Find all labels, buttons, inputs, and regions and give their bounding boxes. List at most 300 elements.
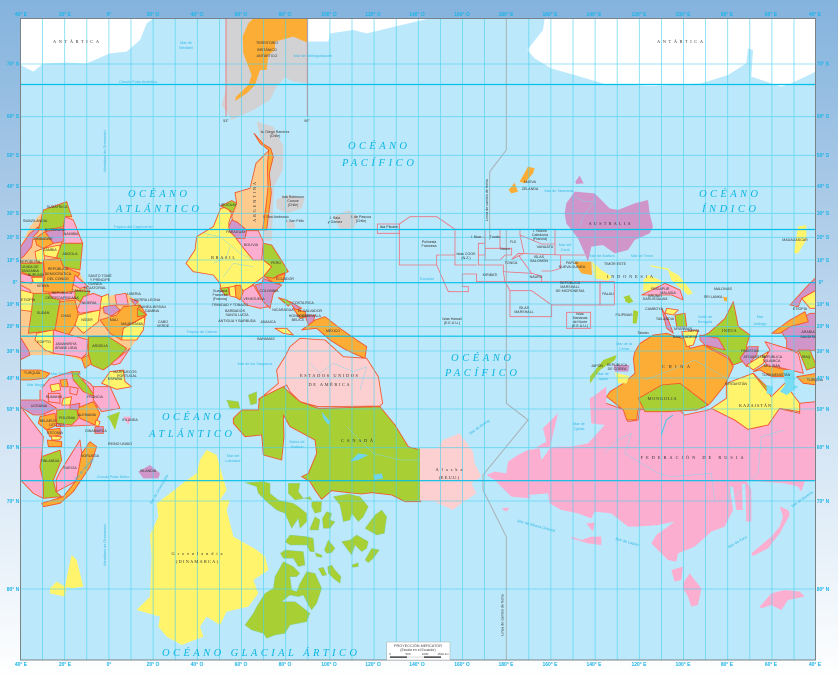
Tasmania (575, 176, 584, 184)
country and island labels: ECUADOR (276, 277, 294, 281)
graticule labels: 20° E (59, 12, 72, 18)
Zimbabwe (35, 232, 53, 248)
water feature labels: Arábigo (753, 322, 767, 326)
Antarctic claim sector (222, 18, 307, 120)
country and island labels: I. Nueva (533, 229, 547, 233)
graticule labels: 120° O (365, 662, 381, 668)
country and island labels: Islas Hawaii (442, 317, 462, 321)
graticule labels: 40° O (191, 12, 204, 18)
country and island labels: I. Sala (330, 216, 340, 220)
water feature labels: Mar de (573, 422, 585, 426)
country and island labels: MARRUECOS (113, 370, 137, 374)
country and island labels: Marianas (573, 316, 588, 320)
graticule labels: 120° O (365, 12, 381, 18)
Arabia (780, 313, 817, 352)
country and island labels: TURKMENISTÁN (762, 373, 791, 377)
water feature labels: Bahía de (289, 440, 305, 444)
Canada mainland (233, 387, 421, 502)
ocean names: ATLÁNTICO (148, 428, 232, 440)
country and island labels: Y PRÍNCIPE (90, 278, 111, 282)
country and island labels: Caledonia (532, 233, 548, 237)
country and island labels: IRLANDA (122, 418, 138, 422)
continent and large country names: ANTÁRTICA (53, 39, 100, 44)
country and island labels: Is. Diego Ramírez (261, 130, 290, 134)
Afghanistan (747, 352, 768, 370)
graticule labels: 40° E (809, 662, 822, 668)
continent and large country names: DE AMÉRICA (308, 382, 350, 387)
country and island labels: BURUNDI (28, 273, 44, 277)
date line labels (485, 179, 505, 636)
country and island labels: PAPÚA (566, 260, 579, 265)
Australia (565, 192, 653, 262)
water feature labels: Mar de Arafura (589, 254, 615, 258)
water feature labels: Mar de Groenlandia (149, 473, 170, 505)
graticule labels: 20° O (147, 12, 160, 18)
country and island labels: BRUNEI (648, 294, 662, 298)
country and island labels: NIGERIA (82, 301, 97, 305)
country and island labels: (Chile) (356, 219, 366, 223)
water feature labels: Mar de Bellingshausen (294, 54, 332, 58)
Southeast Asia islands (590, 270, 727, 383)
water feature labels: Golfo de (698, 315, 712, 319)
graticule labels: 60° N (7, 445, 20, 451)
country and island labels: MÉXICO (326, 328, 340, 333)
continent and large country names: (E.E.U.U.) (439, 475, 460, 480)
country and island labels: REINO UNIDO (108, 442, 132, 446)
Mongolia (638, 383, 708, 412)
graticule labels: 40° E (15, 12, 28, 18)
country and island labels: CAMERÚN (72, 288, 90, 293)
country and island labels: FRANCIA (87, 395, 103, 399)
Ethiopia (21, 290, 33, 312)
country and island labels: VERDE (157, 324, 170, 328)
Libya (53, 330, 88, 358)
Pakistan (740, 347, 758, 367)
country and island labels: KIRGUISTÁN (725, 382, 747, 386)
country and island labels: DEL CONGO (47, 277, 69, 281)
country and island labels: GAMBIA (145, 309, 160, 313)
country and island labels: Crusoe (287, 199, 299, 203)
Arabia edge (20, 337, 30, 360)
water feature labels: Mar de (597, 372, 609, 376)
water feature labels: Mar de Kara (727, 535, 748, 549)
country and island labels: ZIMBABWE (33, 237, 53, 241)
Morocco (112, 348, 130, 365)
ocean names: OCÉANO (162, 411, 221, 423)
country and island labels: BELICE (292, 318, 305, 322)
country and island labels: LETONIA (49, 423, 65, 427)
Colombia (255, 278, 282, 308)
water feature labels: Bengala (698, 320, 713, 324)
water feature labels (27, 41, 814, 566)
Greenland (137, 450, 268, 645)
Egypt (35, 330, 53, 353)
Somalia (21, 285, 32, 298)
graticule labels: 140° E (586, 12, 602, 18)
country and island labels: SAUDITA (800, 335, 816, 339)
country and island labels: NAURU (530, 275, 543, 279)
graticule labels: 160° O (454, 662, 470, 668)
graticule labels: 60° S (817, 114, 830, 120)
Poland (57, 408, 78, 425)
country and island labels: MARSHALL (514, 310, 534, 314)
country and island labels: URUGUAY (219, 203, 237, 207)
Belarus (38, 413, 57, 430)
country and island labels: (Francia) (213, 297, 227, 301)
continent and large country names: AUSTRALIA (588, 221, 631, 226)
country and island labels: BARBADOS (225, 309, 246, 313)
country and island labels: y Gómez (328, 220, 342, 224)
country and island labels: EL SALVADOR (298, 309, 323, 313)
graticule labels: 70° S (817, 62, 830, 68)
country and island labels: ISLAS (519, 306, 530, 310)
West Africa (100, 294, 109, 308)
country and island labels: MALASIA (660, 291, 676, 295)
water feature labels: Mar (757, 315, 764, 319)
country and island labels: MADAGASCAR (782, 238, 808, 242)
graticule labels: 20° S (817, 235, 830, 241)
Central Europe base (40, 372, 98, 427)
country and island labels: TANZANIA (21, 269, 39, 273)
Yemen (772, 312, 808, 333)
graticule labels: 10° S (7, 258, 20, 264)
country and island labels: FIJI (510, 240, 516, 244)
country and island labels: KENYA (37, 284, 50, 288)
scale and projection legend: (Escala en el Ecuador) (400, 648, 436, 652)
country and island labels: NUEVA GUINEA (559, 265, 586, 269)
country and island labels: ISLAS (534, 255, 545, 259)
country and island labels: PORTUGAL (117, 374, 137, 378)
graticule labels: 40° E (15, 662, 28, 668)
country and island labels: ALEMANIA (78, 413, 97, 417)
country and island labels: REPÚBLICA (52, 290, 73, 295)
country and island labels: DARUSSALAM (643, 297, 667, 301)
country and island labels: REPÚBLICA (762, 354, 783, 359)
Kyrgyzstan (753, 372, 754, 374)
country and island labels: PALAU (602, 292, 614, 296)
continent and large country names (53, 39, 772, 564)
Niger (75, 310, 100, 333)
country and island labels: JAPÓN (591, 363, 603, 368)
India (700, 302, 750, 365)
country and island labels: NAMIBIA (64, 232, 79, 236)
country and island labels: Tuvalu (490, 235, 500, 239)
graticule labels: 20° S (7, 235, 20, 241)
graticule labels: 80° E (721, 12, 734, 18)
country and island labels: ANTÁRTICO (257, 54, 278, 58)
Bolivia (236, 231, 263, 260)
country and island labels: AFGANISTÁN (744, 355, 767, 359)
country and island labels: FILIPINAS (616, 313, 633, 317)
water feature labels: Mar del (227, 454, 239, 458)
antarctic claim limits (223, 119, 310, 123)
Botswana (45, 228, 63, 243)
country and island labels: ETIOPÍA (793, 307, 808, 311)
country and island labels: SANTA LUCÍA (225, 313, 249, 317)
Paraguay (229, 220, 247, 238)
water feature labels: Mar Negro (27, 383, 45, 387)
country and island labels: TRINIDAD Y TOBAGO (212, 303, 248, 307)
country and island labels: MARSHALL (560, 285, 580, 289)
New Guinea (574, 262, 592, 275)
Angola (57, 243, 83, 270)
country and island labels: COSTA RICA (292, 301, 314, 305)
Tanzania (21, 263, 43, 277)
graticule labels: 180° E (498, 662, 514, 668)
country and island labels: TERRITORIO (256, 41, 278, 45)
continent and large country names: KAZAJSTÁN (739, 403, 772, 408)
country and island labels: BAHAMAS (257, 337, 275, 341)
country and island labels: MAURITANIA (121, 322, 144, 326)
Svalbard (50, 555, 83, 597)
Kenya (21, 273, 33, 283)
graticule labels: 50° S (817, 153, 830, 159)
graticule labels: 0° (13, 280, 17, 286)
country and island labels: I. Niue (471, 235, 481, 239)
water feature labels: Mar de Bering (469, 419, 490, 436)
Chad (55, 300, 78, 335)
Turkey (797, 373, 817, 385)
graticule labels: 40° S (817, 184, 830, 190)
country and island labels: JAMAHIRIYA (55, 342, 77, 346)
country and island labels: LIBERIA (127, 292, 141, 296)
country and island labels: GUINEA-BISSAU (138, 305, 166, 309)
graticule labels: 120° E (631, 662, 647, 668)
country and island labels: SINGAPUR (651, 287, 670, 291)
country and island labels: MALDIVAS (714, 287, 733, 291)
Uruguay (221, 201, 237, 213)
country and island labels: CABO (158, 320, 168, 324)
graticule labels: 60° O (235, 662, 248, 668)
country and island labels: (E.E.U.U.) (444, 321, 460, 325)
graticule labels: 70° N (817, 499, 830, 505)
graticule labels: 20° O (147, 662, 160, 668)
Russia (486, 387, 816, 562)
Antarctica (21, 18, 816, 87)
Africa (21, 202, 147, 365)
country and island labels: VENEZUELA (243, 297, 265, 301)
New Zealand (520, 167, 535, 183)
Norway (42, 442, 97, 507)
country and island labels: DINAMARCA (85, 429, 107, 433)
United States (258, 338, 383, 407)
graticule labels: 100° E (675, 12, 691, 18)
country and island labels: SWAZILANDIA (23, 219, 48, 223)
water feature labels: Trópico de Cáncer (186, 330, 218, 334)
graticule labels: 160° E (542, 662, 558, 668)
Low Countries (95, 420, 100, 427)
country and island labels: KIRIBATI (483, 273, 497, 277)
Gabon (73, 275, 88, 288)
country and island labels: (N.Z.) (461, 256, 471, 260)
graticule labels: 140° E (586, 662, 602, 668)
ocean names: OCÉANO (128, 188, 187, 200)
graticule labels: 60° E (765, 12, 778, 18)
graticule labels: 40° N (817, 376, 830, 382)
country and island labels: TURQUÍA (807, 378, 824, 382)
country and island labels: MYANMAR (674, 327, 692, 331)
country and island labels: ETIOPÍA (21, 298, 36, 302)
ocean names: ÍNDICO (701, 203, 756, 215)
country and island labels: SUECIA (63, 466, 77, 470)
country and island labels: SUDÁFRICA (47, 205, 68, 209)
Balkans (62, 397, 72, 405)
date line labels: Línea de cambio de fecha (485, 179, 489, 221)
country and island labels: UNIDA DE (22, 265, 39, 269)
Mozambique (21, 227, 38, 258)
country and island labels: BRITÁNICO (257, 48, 277, 52)
graticule labels: 30° S (817, 211, 830, 217)
North Africa, Europe and Middle East (20, 330, 132, 447)
Italy (72, 372, 95, 397)
graticule labels: 0° (819, 280, 823, 286)
country and island labels: TONGA (505, 261, 518, 265)
Central America and Caribbean (275, 298, 315, 335)
graticule labels: 50° S (7, 153, 20, 159)
country and island labels: ESPAÑA (108, 376, 123, 381)
Mauritania (122, 317, 145, 340)
Zambia (42, 245, 60, 258)
country and island labels: CENTROAFRICANA (45, 296, 79, 300)
Black Sea (22, 385, 43, 392)
country and island labels: TIMOR ESTE (604, 262, 627, 266)
country and island labels: Isla Pitcairn (380, 225, 398, 229)
continent and large country names: ARGENTINA (252, 181, 257, 222)
graticule labels: 70° N (7, 499, 20, 505)
Peru (263, 243, 288, 278)
Canadian lakes (322, 412, 383, 480)
country and island labels: ZAMBIA (43, 248, 57, 252)
water feature labels: Mar de Siberia Oriental (517, 519, 556, 533)
country and island labels: GUATEMALA (299, 314, 322, 318)
Malawi (35, 248, 45, 263)
ocean names: ATLÁNTICO (115, 203, 199, 215)
graticule labels: 50° N (7, 407, 20, 413)
Iceland (138, 465, 160, 478)
Cambodia (665, 308, 678, 315)
Russian Arctic islands (501, 507, 805, 610)
country and island labels: SALOMÓN (530, 258, 548, 263)
country and island labels: Nauru (500, 247, 510, 251)
country and island labels: FINLANDIA (41, 459, 60, 463)
water feature labels: Hudson (290, 445, 304, 449)
continent and large country names: (DINAMARCA) (176, 559, 219, 564)
country and island labels: Taiwán (637, 331, 649, 335)
country and island labels: ÁRABE LIBIA (55, 346, 78, 350)
Algeria (88, 337, 127, 370)
country and island labels: EGIPTO (37, 340, 51, 344)
water feature labels: Círculo Polar Antártico (119, 80, 157, 84)
graticule labels: 10° N (7, 302, 20, 308)
water feature labels: Mar de los Sargazos (238, 362, 273, 366)
graticule labels: 60° O (235, 12, 248, 18)
antarctic claim limits: 90° (304, 119, 310, 123)
country and island labels: NEPAL (688, 329, 700, 333)
Scandinavia and northwest Russia (21, 407, 97, 507)
Nigeria (77, 293, 102, 313)
graticule labels: 30° N (7, 349, 20, 355)
graticule labels: 10° S (817, 258, 830, 264)
Iraq (798, 350, 817, 370)
country and island labels: I. de Pascua (351, 215, 371, 219)
country and island labels: ARGELIA (92, 344, 108, 348)
country and island labels: DE COREA (608, 367, 627, 371)
country and island labels: SUDÁN (37, 311, 50, 315)
country and island labels: Guayana (213, 289, 227, 293)
continent and large country names: MONGOLIA (648, 396, 677, 401)
graticule labels: 140° O (409, 662, 425, 668)
continent and large country names: INDONESIA (607, 274, 654, 279)
country and island labels: ESTONIA (47, 431, 63, 435)
country and island labels: I. San Ambrosio (263, 215, 289, 219)
Romania (48, 393, 60, 403)
Asia countries (607, 283, 817, 420)
country and island labels: NORUEGA (81, 454, 100, 458)
water feature labels: Coral (560, 248, 570, 252)
graticule labels: 80° N (7, 587, 20, 593)
country and island labels: DE MICRONESIA (556, 289, 585, 293)
Kazakhstan (711, 373, 800, 429)
Finland (40, 450, 62, 498)
country and island labels: ANGOLA (63, 252, 78, 256)
country and island labels: ARABIA (801, 330, 815, 334)
Sweden (56, 440, 82, 492)
water feature labels: Mar de Noruega (74, 457, 95, 481)
scale and projection legend (387, 642, 450, 660)
Nepal and Bhutan (700, 335, 725, 350)
country and island labels: BANGLADESH (673, 335, 698, 339)
United Kingdom and Ireland (107, 412, 132, 430)
country and island labels: BOTSWANA (45, 228, 66, 232)
Guianas (220, 287, 229, 295)
South America (186, 133, 288, 308)
Myanmar (682, 330, 698, 347)
country and island labels: CHAD (61, 314, 71, 318)
Thailand (675, 313, 687, 327)
scale and projection legend: 500 (405, 652, 411, 656)
water feature labels: Japón (598, 377, 608, 381)
scale and projection legend: 0 (389, 652, 391, 656)
country and island labels: Islas (576, 312, 584, 316)
Central African Rep. (48, 292, 77, 300)
graticule labels: 80° O (279, 12, 292, 18)
graticule labels: 0° (107, 12, 111, 18)
graticule labels: 20° E (59, 662, 72, 668)
graticule labels: 40° O (191, 662, 204, 668)
country and island labels: DEL IRÁN (764, 364, 781, 368)
water feature labels: Labrador (225, 459, 241, 463)
country and island labels: CAMBOYA (645, 307, 663, 311)
ocean names: PACÍFICO (341, 157, 414, 169)
country and island labels: REPÚBLICA (607, 362, 628, 367)
country and island labels: JAMAICA (260, 320, 276, 324)
Turkey (20, 370, 50, 380)
country and island labels: del Norte (573, 320, 587, 324)
continent and large country names: CHINA (662, 364, 691, 369)
scale and projection legend: 1500 km (437, 652, 449, 656)
Chile (254, 133, 273, 230)
water feature labels: China (619, 347, 630, 351)
country and island labels: ZELANDA (522, 187, 539, 191)
Russia west (21, 407, 43, 498)
graticule labels: 30° N (817, 349, 830, 355)
D.R. Congo (43, 258, 80, 293)
Ecuador (265, 273, 285, 285)
water feature labels: Weddell (179, 46, 193, 50)
China (607, 333, 733, 420)
country and island labels: DEMOCRÁTICA (45, 272, 72, 276)
water feature labels: Mar de Tasmania (544, 189, 574, 193)
